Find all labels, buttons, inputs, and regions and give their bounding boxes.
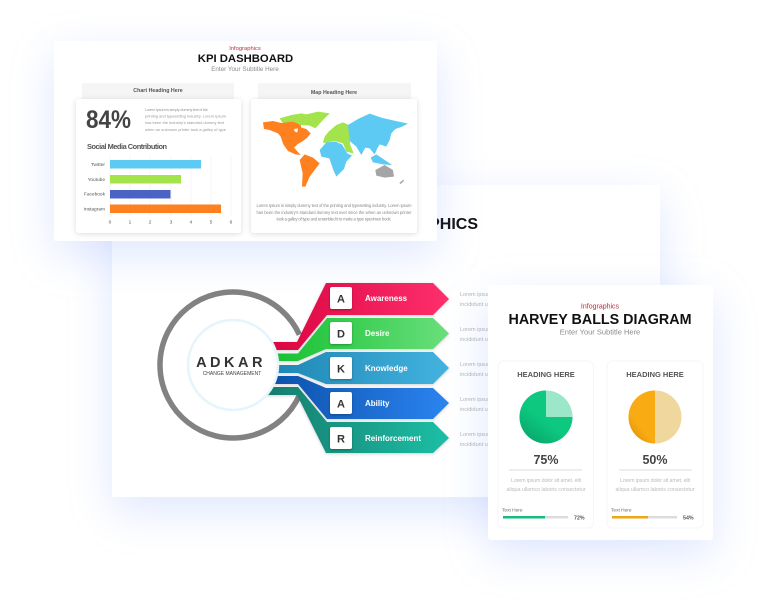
arrow: Awareness: A — [337, 294, 345, 306]
KPI heading: Enter Your Subtitle Here — [211, 66, 279, 73]
Harvey heading — [509, 304, 691, 336]
tab: map heading: Map Heading Here — [311, 90, 357, 96]
progress: 72% — [503, 516, 585, 522]
ADKAR ring — [160, 292, 299, 438]
arrow: Knowledge: Knowledge — [365, 364, 408, 373]
progress: 54%: 54% — [683, 516, 694, 522]
arrow: Reinforcement: R — [337, 434, 345, 446]
map description — [256, 203, 412, 222]
bar chart: 4 — [190, 220, 193, 226]
arrow: Reinforcement: Reinforcement — [365, 434, 421, 443]
arrow: Awareness — [265, 283, 449, 350]
arrow: Desire: Desire — [365, 329, 390, 338]
side descriptions: incididunt ut labore — [460, 442, 506, 448]
side descriptions: incididunt ut labore — [460, 372, 506, 378]
arrow: Reinforcement — [262, 387, 449, 453]
bar chart: Youtube — [88, 177, 105, 183]
chart title: Social Media Contribution — [87, 142, 167, 151]
stat description: has been the industry's standard dummy text — [145, 120, 225, 125]
card: 75%: Lorem ipsum dolor sit amet. elit — [511, 478, 582, 484]
map description: has been the industry's standard dummy text ever since the when an unknown printer — [256, 210, 412, 215]
card: 50%: HEADING HERE — [626, 370, 684, 379]
panel: map — [251, 99, 417, 233]
card: 50%: Lorem ipsum dolor sit amet. elit — [620, 478, 691, 484]
stat description: printing and typesetting industry. Lorem Ipsum — [145, 114, 227, 118]
Harvey heading: HARVEY BALLS DIAGRAM — [509, 312, 691, 328]
side descriptions: Lorem ipsum dolor — [460, 362, 506, 368]
side descriptions: Lorem ipsum dolor — [460, 397, 506, 403]
panel: Harvey balls — [488, 285, 713, 540]
side descriptions: Lorem ipsum dolor — [460, 327, 506, 333]
progress: 72%: 72% — [574, 516, 585, 522]
arrow: Ability — [265, 376, 449, 419]
card: 75%: 75% — [533, 453, 559, 467]
card: 75% — [498, 361, 594, 528]
side descriptions: incididunt ut labore — [460, 407, 506, 413]
pie: 50% — [628, 390, 682, 444]
arrow: Ability: A — [337, 398, 345, 410]
KPI heading — [198, 46, 293, 73]
arrow: Awareness: Awareness — [365, 294, 408, 303]
bar chart: 0 — [109, 220, 112, 226]
side descriptions: incididunt ut labore — [460, 302, 506, 308]
KPI heading: Infographics — [229, 46, 261, 52]
bar chart: Facebook — [84, 192, 106, 198]
arrow: Desire: D — [337, 328, 345, 340]
map description: took a galley of type and scrambled it to make a type specimen book. — [276, 216, 392, 222]
arrow: Knowledge: K — [337, 364, 345, 376]
tab: map heading — [258, 83, 411, 101]
ADKAR label: ADKAR — [196, 355, 266, 371]
side descriptions: incididunt ut labore — [460, 337, 506, 343]
map description: Lorem Ipsum is simply dummy text of the printing and typesetting industry. Lorem Ipsum — [256, 203, 412, 208]
KPI heading: KPI DASHBOARD — [198, 53, 293, 65]
bar chart: 5 — [210, 220, 213, 226]
tab: chart heading: Chart Heading Here — [133, 88, 183, 94]
bar chart: 3 — [170, 220, 173, 226]
bar chart — [84, 156, 233, 226]
card: 50%: 50% — [642, 453, 668, 467]
panel: KPI dashboard — [54, 41, 437, 241]
panel: chart — [76, 99, 241, 233]
stat description: when an unknown printer took a galley of type — [145, 127, 227, 132]
bar chart: Twitter — [91, 162, 105, 168]
bar chart: 2 — [149, 220, 152, 226]
stat: 84%: 84% — [86, 106, 131, 134]
Harvey heading: Enter Your Subtitle Here — [560, 328, 640, 336]
card: 50%: Text Here — [611, 508, 632, 514]
ADKAR label: CHANGE MANAGEMENT — [203, 371, 261, 377]
inner circle — [188, 320, 278, 410]
arrow: Desire — [265, 318, 449, 361]
pie: 75% — [520, 390, 572, 444]
world map — [263, 112, 408, 187]
slide title: INFOGRAPHICS — [355, 216, 478, 233]
side descriptions: Lorem ipsum dolor — [460, 432, 506, 438]
stat description — [145, 107, 227, 132]
bar chart: 1 — [129, 220, 132, 226]
stat description: Lorem Ipsum is simply dummy text of the — [145, 107, 209, 112]
tab: chart heading — [82, 83, 234, 101]
card: 75%: aliqua ullamco laboris consectetur — [506, 487, 586, 493]
side descriptions — [460, 292, 506, 448]
card: 75%: HEADING HERE — [517, 370, 575, 379]
panel: ADKAR slide — [112, 185, 660, 497]
bar chart: 6 — [230, 220, 233, 226]
card: 50%: aliqua ullamco laboris consectetur — [616, 487, 695, 493]
arrow: Ability: Ability — [365, 399, 390, 408]
Harvey heading: Infographics — [581, 304, 620, 310]
arrow: Knowledge — [265, 352, 449, 384]
card: 50% — [607, 361, 703, 528]
bar chart: Instagram — [84, 206, 105, 212]
side descriptions: Lorem ipsum dolor — [460, 292, 506, 298]
progress: 54% — [612, 516, 694, 522]
card: 75%: Text Here — [502, 508, 523, 514]
